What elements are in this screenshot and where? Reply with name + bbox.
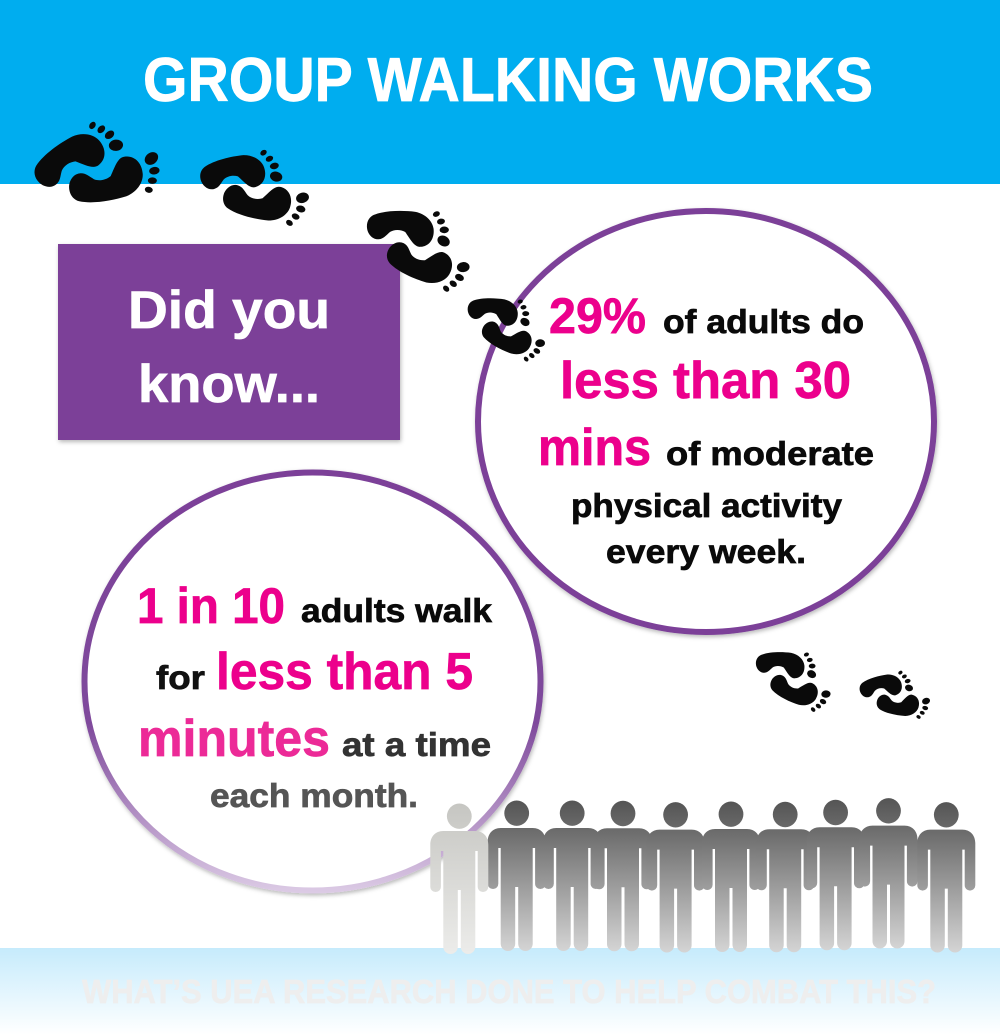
panel: did you know box: [58, 244, 400, 440]
pictogram: ten people, one highlighted: [430, 798, 975, 954]
stat text: 29 percent: mins: [538, 419, 651, 477]
stat text: 1 in 10: less than 5: [216, 643, 473, 701]
bottom fading band: [0, 948, 1000, 1035]
panel: 29 percent circle: [478, 211, 934, 632]
stat text: 29 percent: physical activity: [571, 487, 843, 524]
stat text: 1 in 10: [137, 578, 493, 814]
stat text: 29 percent: less than 30: [560, 352, 851, 410]
top header band: [0, 0, 1000, 184]
did you know heading: [128, 281, 330, 414]
did you know heading: Did you: [128, 281, 330, 340]
footprint pair 4: [467, 298, 548, 367]
stat text: 29 percent: [538, 288, 874, 570]
stat text: 1 in 10: adults walk: [301, 592, 493, 629]
did you know heading: know...: [138, 355, 320, 414]
footprint pair 3: [367, 210, 474, 298]
footprint pair 5: [756, 651, 834, 717]
panel: 1 in 10 circle: [84, 472, 540, 890]
stat text: 29 percent: of moderate: [666, 435, 874, 472]
stat text: 29 percent: 29%: [549, 288, 646, 344]
light person: [430, 804, 488, 954]
stat text: 1 in 10: each month.: [210, 777, 418, 814]
stat text: 1 in 10: at a time: [342, 726, 491, 763]
stat text: 29 percent: every week.: [606, 533, 806, 570]
footprint pair 6: [857, 668, 932, 721]
stat text: 1 in 10: minutes: [138, 710, 330, 768]
footprint pair 1: [28, 112, 166, 206]
footprints trail: [28, 112, 932, 721]
stat text: 1 in 10: 1 in 10: [137, 578, 285, 634]
footprint pair 2: [197, 146, 312, 230]
stat text: 29 percent: of adults do: [663, 303, 864, 340]
stat text: 1 in 10: for: [156, 659, 205, 696]
title: GROUP WALKING WORKS: [143, 46, 873, 115]
bottom question text: WHAT’S UEA RESEARCH DONE TO HELP COMBAT THIS?: [82, 973, 936, 1010]
